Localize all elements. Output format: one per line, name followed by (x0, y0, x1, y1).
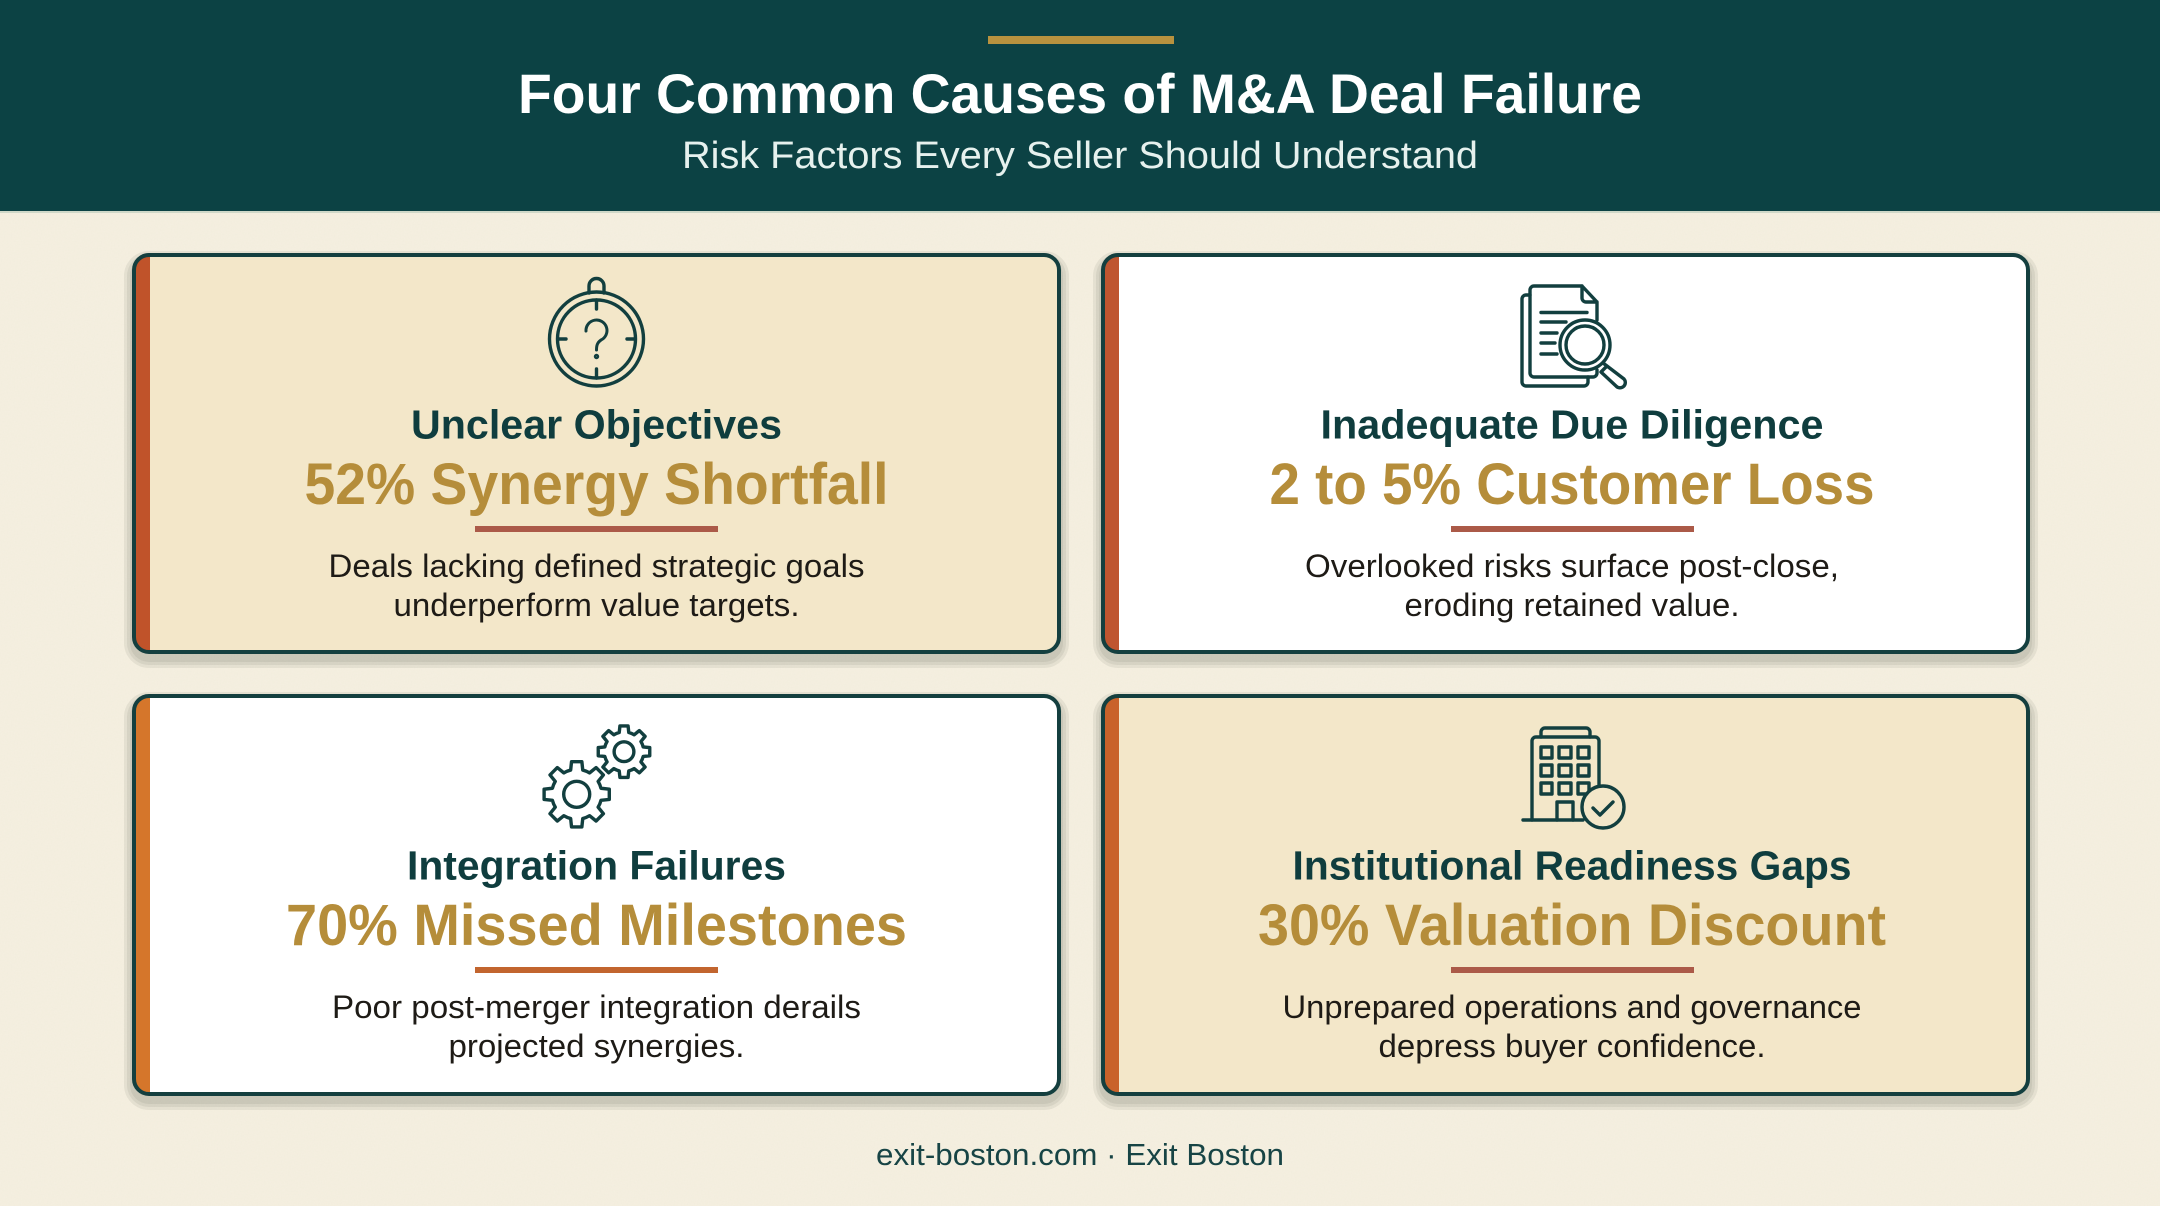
icon: document with magnifying glass (1522, 286, 1625, 388)
statistic: 52% Synergy Shortfall (304, 452, 888, 517)
subtitle: Risk Factors Every Seller Should Understand (682, 135, 1478, 177)
card heading: Unclear Objectives (411, 402, 782, 448)
description (1282, 989, 1862, 1064)
description: depress buyer confidence. (1378, 1028, 1766, 1064)
description: eroding retained value. (1404, 587, 1740, 623)
header band (0, 0, 2160, 213)
description: Unprepared operations and governance (1282, 989, 1862, 1025)
rule (475, 967, 718, 973)
panel: institutional readiness gaps (1093, 692, 2038, 1110)
statistic: 2 to 5% Customer Loss (1270, 452, 1874, 517)
rule (475, 526, 718, 532)
accent bar (988, 36, 1174, 44)
card heading: Inadequate Due Diligence (1320, 402, 1824, 448)
statistic: 30% Valuation Discount (1258, 893, 1886, 958)
description (328, 548, 864, 623)
icon: office building with check badge (1523, 728, 1624, 828)
panel: inadequate due diligence (1093, 251, 2038, 668)
card heading: Integration Failures (407, 842, 786, 888)
rule (1451, 526, 1694, 532)
description: Overlooked risks surface post-close, (1305, 548, 1839, 584)
description: Deals lacking defined strategic goals (328, 548, 864, 584)
card heading: Institutional Readiness Gaps (1292, 842, 1852, 888)
icon: gears (544, 726, 650, 827)
description: underperform value targets. (394, 587, 800, 623)
rule (1451, 967, 1694, 973)
footer: exit-boston.com · Exit Boston (876, 1137, 1284, 1172)
panel: integration failures (124, 692, 1069, 1110)
description: projected synergies. (448, 1028, 744, 1064)
icon: stopwatch with question mark (550, 278, 644, 386)
description: Poor post-merger integration derails (332, 989, 861, 1025)
statistic: 70% Missed Milestones (286, 893, 907, 958)
panel: unclear objectives (124, 251, 1069, 668)
description (332, 989, 861, 1064)
description (1305, 548, 1839, 623)
title: Four Common Causes of M&A Deal Failure (518, 62, 1642, 125)
